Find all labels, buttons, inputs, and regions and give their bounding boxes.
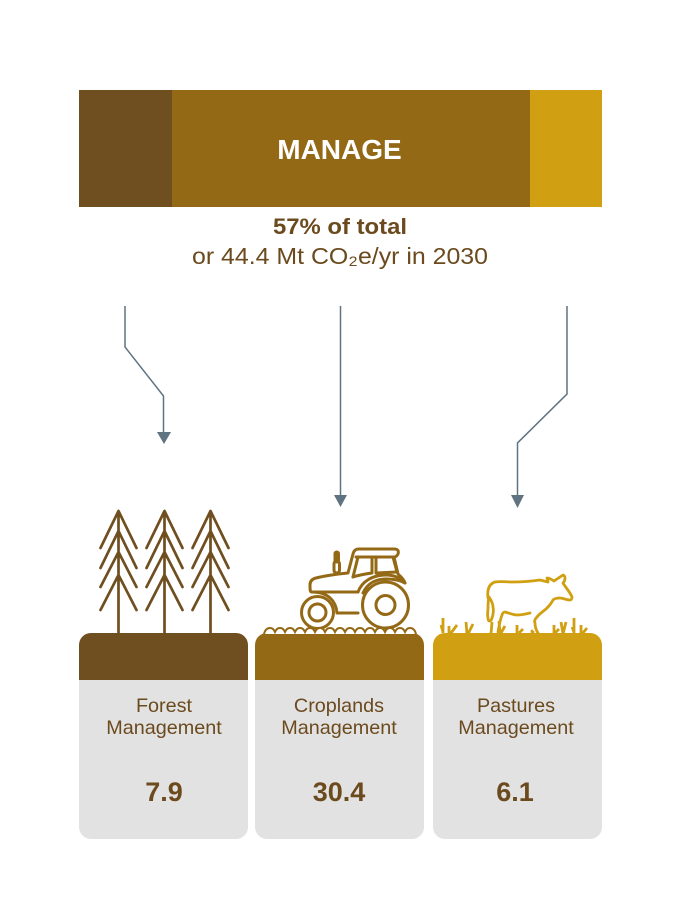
soil band: croplands xyxy=(255,633,424,680)
panel: forest management xyxy=(79,633,248,839)
arrow: to forest management xyxy=(125,306,171,444)
text block: share of total xyxy=(192,214,488,269)
soil band: pastures xyxy=(433,633,602,680)
soil mounds: croplands xyxy=(264,628,416,634)
icon: pasture grass xyxy=(441,618,587,634)
text block: share of total: or 44.4 Mt CO₂e/yr in 2030 xyxy=(192,243,488,269)
panel: pastures management xyxy=(433,633,602,839)
soil band: forest xyxy=(79,633,248,680)
panel: croplands management xyxy=(255,628,424,839)
label: pastures management: Pastures xyxy=(477,695,555,717)
value: 7.9: 7.9 xyxy=(145,777,183,807)
arrow: to croplands management xyxy=(334,306,347,507)
icon: tractor xyxy=(302,549,408,628)
label: forest management: Forest xyxy=(136,695,192,717)
panel: manage header bar xyxy=(79,90,602,207)
value: 6.1: 6.1 xyxy=(496,777,534,807)
label: pastures management: Management xyxy=(458,717,574,739)
value: 30.4: 30.4 xyxy=(313,777,365,807)
label: forest management: Management xyxy=(106,717,222,739)
icon: forest trees xyxy=(100,511,228,634)
icon: cow xyxy=(488,575,572,633)
text block: share of total: 57% of total xyxy=(273,214,407,239)
heading: MANAGE: MANAGE xyxy=(277,134,402,165)
label: croplands management: Management xyxy=(281,717,397,739)
arrow: to pastures management xyxy=(511,306,567,508)
label: croplands management: Croplands xyxy=(294,695,384,717)
